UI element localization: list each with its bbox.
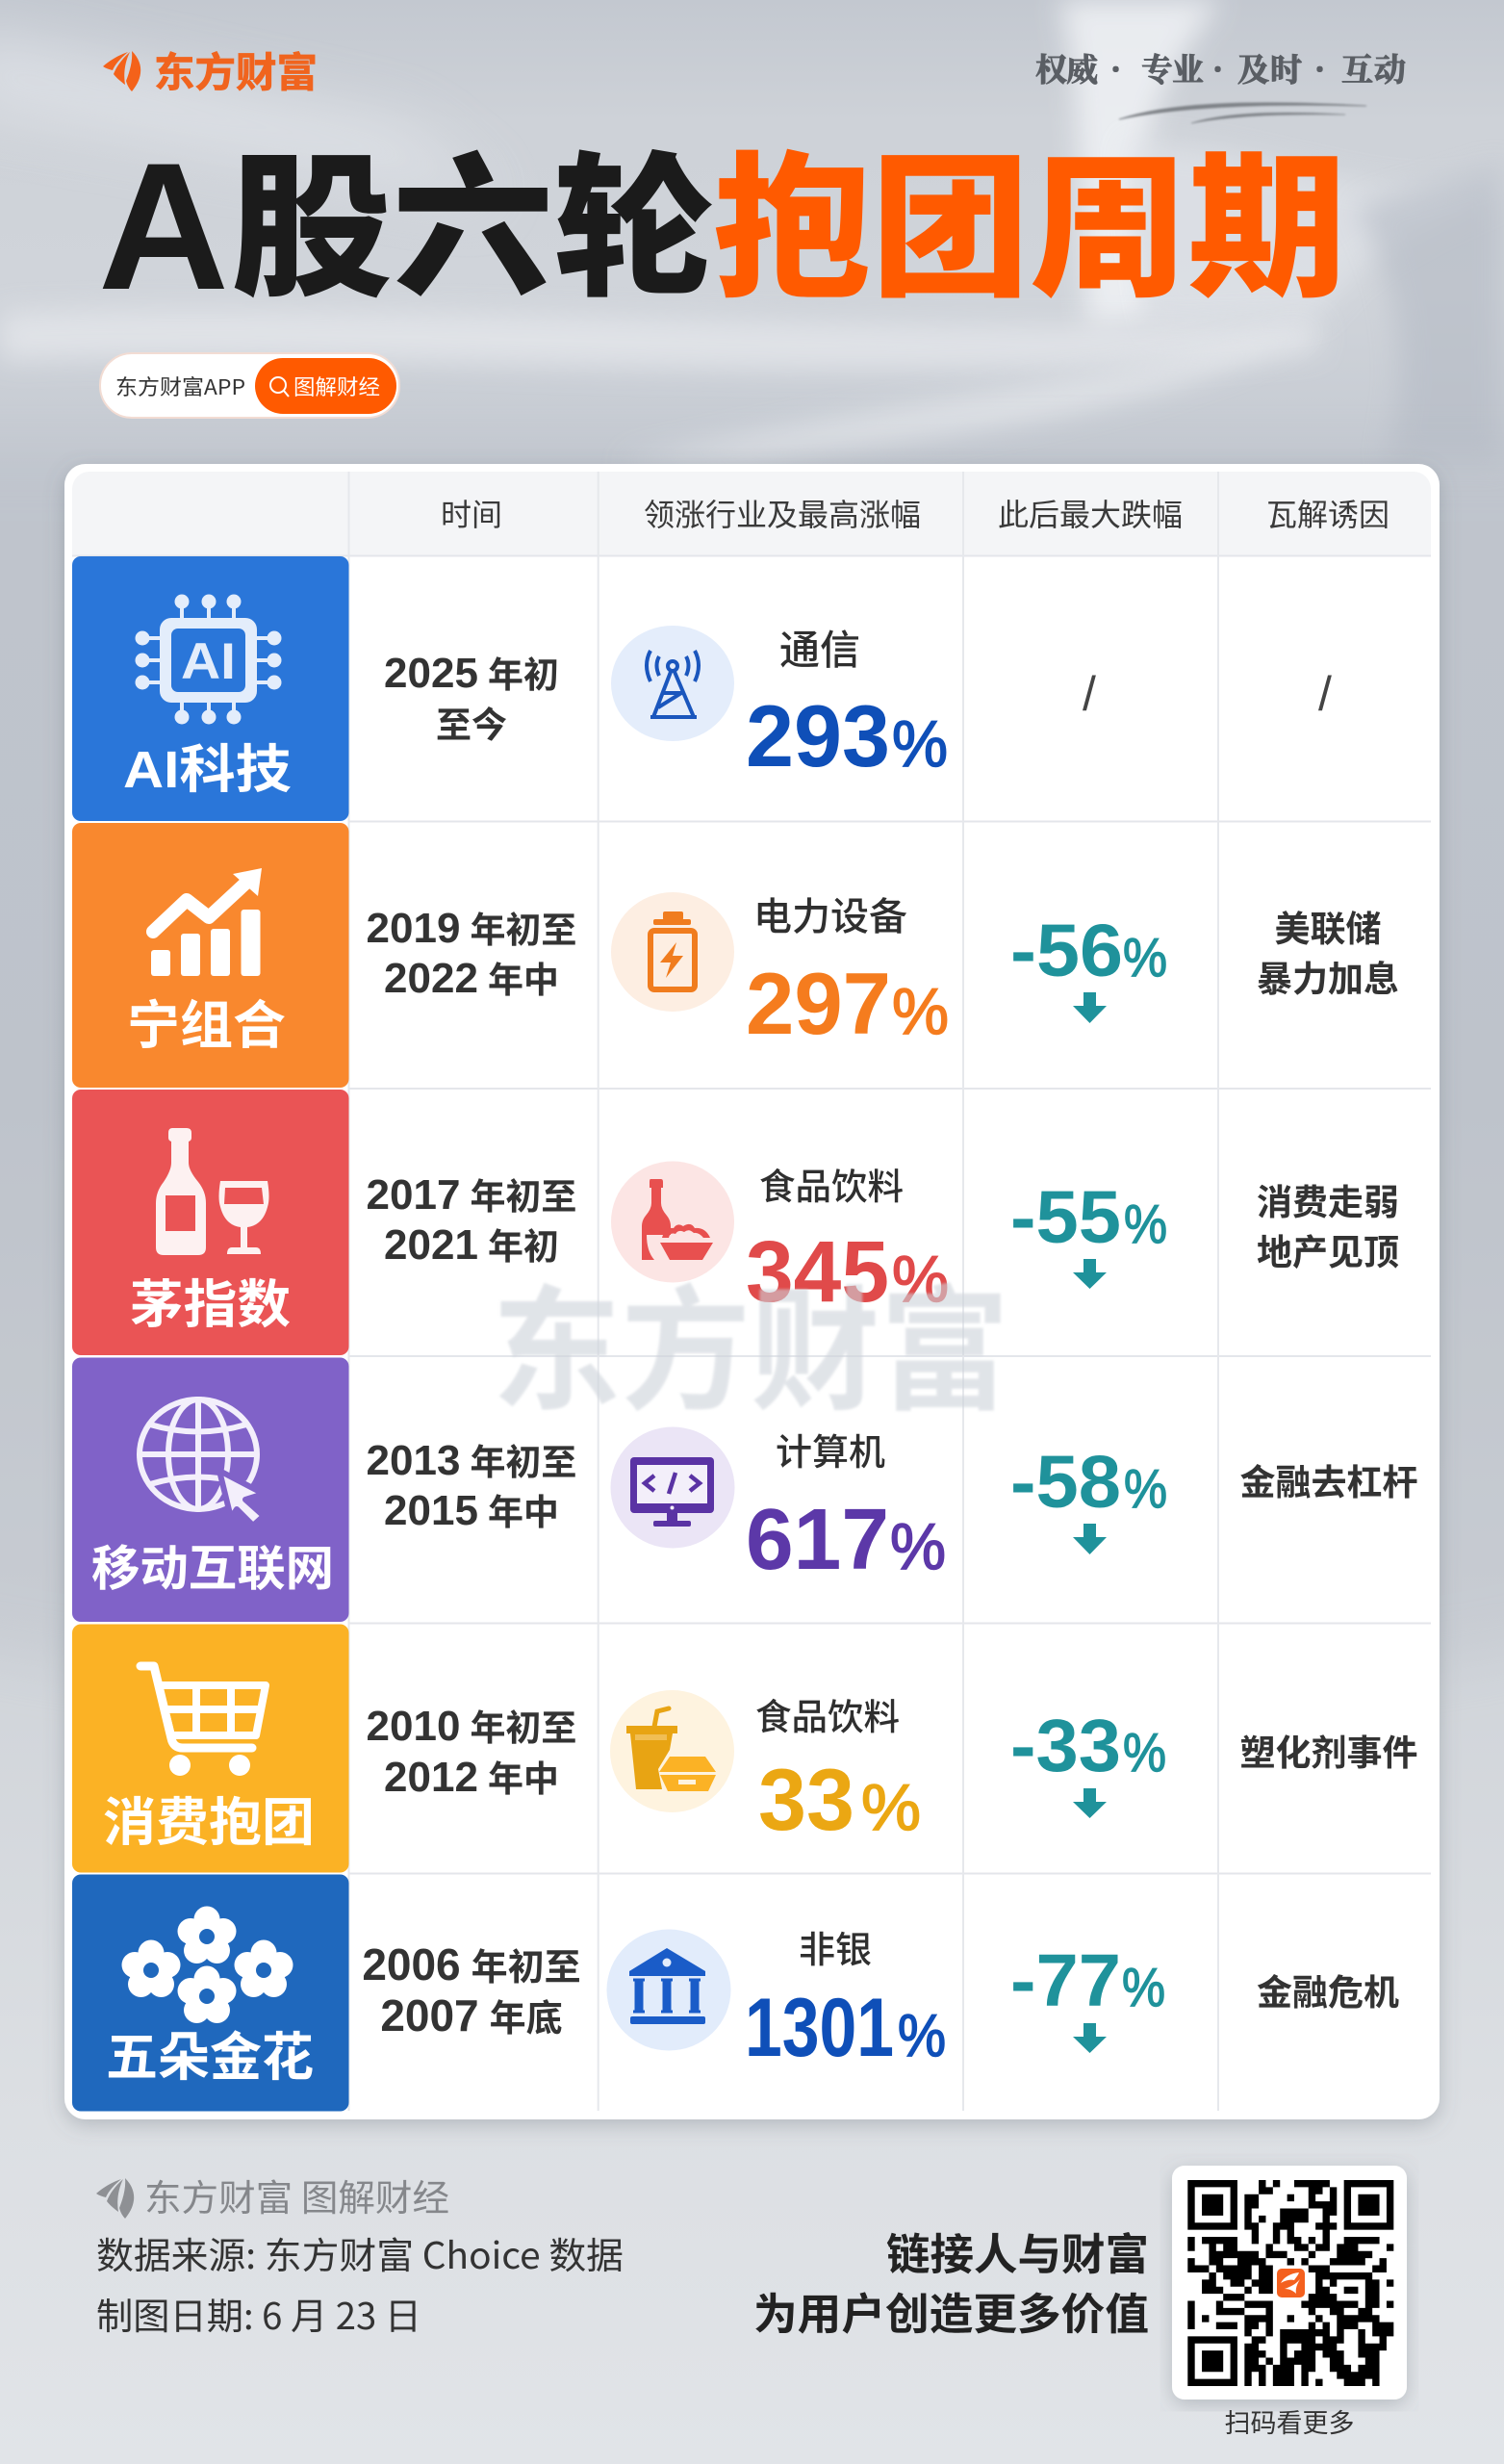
- icon: liquor bottle and food bowl: [611, 1161, 734, 1282]
- leading sector and gain: 电力设备 297%: 297: [746, 956, 891, 1053]
- slogan: footer tagline: [753, 2220, 1149, 2342]
- leading sector and gain: 通信 293%: [746, 618, 948, 785]
- leading sector and gain: 非银 1301%: 非银: [799, 1920, 872, 1973]
- theme cell: 移动互联网: [72, 1357, 348, 1622]
- badge: app pill: [100, 353, 399, 418]
- leading sector and gain: 通信 293%: %: [892, 707, 948, 781]
- theme cell: 宁组合: [72, 823, 348, 1088]
- title: 股六轮: [231, 102, 715, 328]
- leading sector and gain: 通信 293%: 通信: [779, 618, 860, 677]
- leading sector and gain: 非银 1301%: [745, 1920, 946, 2074]
- collapse trigger: 消费走弱地产见顶: 地产见顶: [1257, 1223, 1399, 1275]
- QR caption: 扫码看更多: [1224, 2402, 1355, 2440]
- title: 抱团周期: [713, 102, 1346, 328]
- table header row: 此后最大跌幅: [998, 491, 1183, 535]
- leading sector and gain: 非银 1301%: %: [898, 2003, 946, 2069]
- max drop: -55%: -55: [1010, 1176, 1121, 1259]
- collapse trigger: 美联储暴力加息: 美联储: [1274, 900, 1382, 952]
- QR code card: [1172, 2166, 1407, 2400]
- row 5: 消费抱团: 2012 年中: [384, 1750, 559, 1802]
- row 5: 消费抱团: [72, 1625, 1418, 1873]
- leading sector and gain: 计算机 617%: 计算机: [776, 1423, 885, 1476]
- leading sector and gain: 食品饮料 33%: 33: [758, 1752, 854, 1849]
- max drop: -77%: %: [1122, 1957, 1165, 2018]
- max drop: -58%: [1010, 1441, 1167, 1554]
- leading sector and gain: 计算机 617%: [746, 1423, 946, 1588]
- row 4: 移动互联网: [72, 1357, 1418, 1622]
- period: 2019-2022: 2019 年初至: [367, 901, 576, 953]
- collapse trigger: 金融危机: 金融危机: [1257, 1964, 1399, 2015]
- max drop: -77%: [1010, 1939, 1165, 2053]
- badge: app pill: 东方财富APP: [115, 371, 245, 401]
- theme cell: 消费抱团: [72, 1625, 348, 1873]
- row 3: 茅指数: 2021 年初: [384, 1218, 559, 1270]
- theme cell: AI科技: [72, 556, 348, 821]
- leading sector and gain: 食品饮料 345%: %: [892, 1243, 949, 1316]
- icon: computer monitor: [610, 1426, 735, 1548]
- slogan: footer tagline: 链接人与财富: [886, 2220, 1149, 2282]
- leading sector and gain: 食品饮料 33%: [755, 1687, 921, 1849]
- row 4: 移动互联网: 2015 年中: [384, 1483, 559, 1535]
- leading sector and gain: 计算机 617%: 617: [746, 1492, 889, 1588]
- icon: bank building: [606, 1929, 731, 2050]
- icon: signal tower: [611, 626, 734, 741]
- period: 2006-2007: 2006 年初至: [362, 1938, 581, 1990]
- title: A: [98, 125, 229, 327]
- leading sector and gain: 电力设备 297%: 电力设备: [753, 886, 907, 941]
- leading sector and gain: 食品饮料 33%: 食品饮料: [755, 1687, 900, 1740]
- max drop: -55%: [1010, 1176, 1167, 1289]
- max drop: -33%: -33: [1010, 1705, 1121, 1787]
- badge: app pill: 图解财经: [293, 371, 380, 401]
- theme cell: 消费抱团: 消费抱团: [103, 1780, 315, 1856]
- max drop: -58%: %: [1124, 1458, 1167, 1520]
- theme cell: 宁组合: 宁组合: [127, 983, 286, 1059]
- panel: table card: [64, 464, 1440, 2119]
- title: [98, 102, 1346, 328]
- footer: source notes: [96, 2169, 624, 2340]
- max drop: -58%: -58: [1010, 1441, 1121, 1524]
- slogan: footer tagline: 为用户创造更多价值: [753, 2279, 1149, 2342]
- table header row: 领涨行业及最高涨幅: [644, 491, 921, 535]
- icon: battery: [611, 892, 734, 1012]
- chart date: 制图日期: 6 月 23 日: [96, 2287, 421, 2340]
- icon: drink and takeout box: [610, 1690, 734, 1812]
- row 1: AI科技: [72, 556, 1332, 821]
- max drop: -56%: %: [1123, 927, 1167, 988]
- max drop: -56%: [1010, 910, 1167, 1023]
- collapse trigger: 金融去杠杆: 金融去杠杆: [1239, 1453, 1418, 1505]
- leading sector and gain: 计算机 617%: %: [890, 1510, 946, 1583]
- leading sector and gain: 食品饮料 345%: 345: [746, 1224, 889, 1321]
- theme cell: AI科技: AI科技: [123, 741, 292, 799]
- theme cell: 茅指数: 茅指数: [130, 1262, 291, 1338]
- row 3: 茅指数: [72, 1090, 1399, 1355]
- collapse trigger: 美联储暴力加息: 暴力加息: [1257, 950, 1399, 1002]
- watermark: 东方财富: [492, 1244, 1009, 1438]
- leading sector and gain: 通信 293%: 293: [746, 688, 890, 785]
- max drop: -55%: %: [1124, 1194, 1167, 1255]
- leading sector and gain: 非银 1301%: 1301: [745, 1982, 894, 2074]
- collapse trigger: 消费走弱地产见顶: 消费走弱: [1257, 1173, 1399, 1225]
- max drop: -56%: -56: [1010, 910, 1123, 992]
- max drop: -33%: %: [1123, 1722, 1166, 1784]
- max drop: -77%: -77: [1010, 1939, 1121, 2022]
- leading sector and gain: 食品饮料 33%: %: [861, 1771, 921, 1844]
- footer brand: 东方财富 图解财经: [144, 2169, 449, 2221]
- row 6: 五朵金花: [72, 1875, 1399, 2112]
- table header row: [441, 491, 1389, 535]
- data source: 数据来源: 东方财富 Choice 数据: [96, 2226, 624, 2279]
- no trigger value: /: [1318, 667, 1332, 721]
- period: 2017-2021: 2017 年初至: [367, 1168, 576, 1219]
- theme cell: AI科技: AI: [181, 633, 236, 690]
- collapse trigger: 消费走弱地产见顶: [1257, 1173, 1399, 1275]
- period: 2025: 2025 年初: [384, 646, 559, 698]
- collapse trigger: 塑化剂事件: 塑化剂事件: [1239, 1724, 1418, 1776]
- row 2: 宁组合: [72, 823, 1399, 1088]
- slogan: brush calligraphy: 权威·专业·及时·互动: [1035, 45, 1406, 90]
- leading sector and gain: 电力设备 297%: %: [892, 975, 949, 1048]
- theme cell: 茅指数: [72, 1090, 348, 1355]
- collapse trigger: 美联储暴力加息: [1257, 900, 1399, 1002]
- theme cell: 五朵金花: 五朵金花: [106, 2015, 314, 2091]
- table header row: 瓦解诱因: [1266, 491, 1389, 535]
- no drop value: /: [1083, 667, 1096, 721]
- row 2: 宁组合: 2022 年中: [384, 951, 559, 1003]
- leading sector and gain: 食品饮料 345%: [746, 1157, 949, 1321]
- row 6: 五朵金花: 2007 年底: [380, 1989, 563, 2041]
- row 1: AI科技: 至今: [436, 696, 507, 748]
- logo: Eastmoney flame and wordmark: 东方财富: [154, 40, 318, 99]
- theme cell: 五朵金花: [72, 1875, 348, 2112]
- period: 2010-2012: 2010 年初至: [367, 1699, 576, 1751]
- table header row: 时间: [441, 491, 502, 535]
- max drop: -33%: [1010, 1705, 1166, 1818]
- leading sector and gain: 电力设备 297%: [746, 886, 949, 1053]
- theme cell: 移动互联网: 移动互联网: [91, 1530, 334, 1600]
- period: 2013-2015: 2013 年初至: [367, 1433, 576, 1485]
- slogan: brush calligraphy: [1035, 45, 1406, 123]
- leading sector and gain: 食品饮料 345%: 食品饮料: [759, 1157, 904, 1210]
